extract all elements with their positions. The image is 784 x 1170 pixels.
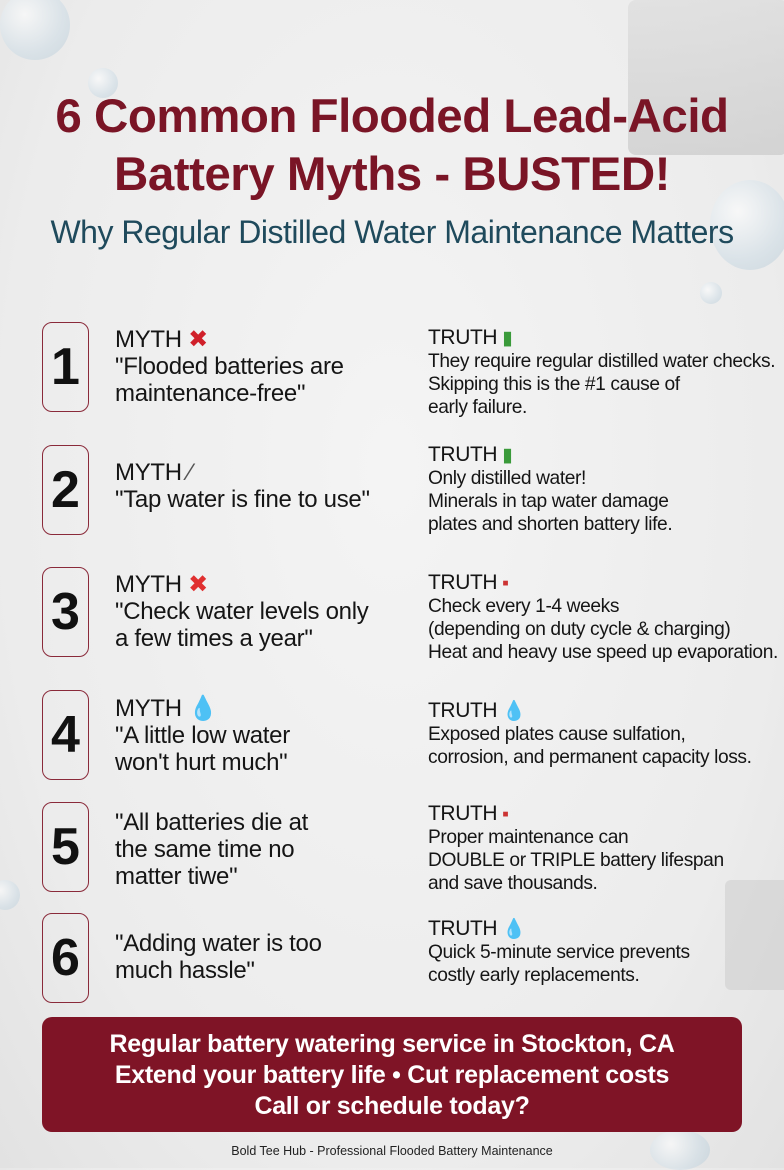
truth 2 — [428, 443, 672, 535]
title — [55, 90, 729, 201]
myth 5: matter tiwe" — [115, 863, 237, 890]
footer: Bold Tee Hub - Professional Flooded Battery Maintenance — [231, 1144, 553, 1158]
truth 2: Minerals in tap water damage — [428, 491, 668, 512]
number 4 — [42, 690, 89, 780]
truth 4: corrosion, and permanent capacity loss. — [428, 747, 752, 768]
myth 3: a few times a year" — [115, 625, 313, 652]
battery illustration bottom right — [725, 880, 784, 990]
number 1 — [42, 322, 89, 412]
truth 3: TRUTH ▪ — [428, 571, 508, 594]
myth 4: won't hurt much" — [115, 749, 287, 776]
row 4 — [42, 690, 752, 780]
number 6 — [42, 913, 89, 1003]
myth 1: MYTH ✖ — [115, 326, 208, 353]
truth 1: early failure. — [428, 397, 527, 418]
myth 2: MYTH ⁄ — [115, 459, 192, 486]
myth 4: MYTH 💧 — [115, 695, 218, 722]
truth 1: Skipping this is the #1 cause of — [428, 374, 680, 395]
myth 3: MYTH ✖ — [115, 571, 208, 598]
number 3 — [42, 567, 89, 657]
myth 5: "All batteries die at — [115, 809, 308, 836]
number 2: 2 — [51, 461, 80, 519]
truth 4 — [428, 699, 752, 768]
myth 2 — [115, 459, 370, 513]
myth 6: "Adding water is too — [115, 930, 322, 957]
row 1 — [42, 322, 775, 418]
myth 4 — [115, 694, 290, 776]
row 6 — [42, 913, 690, 1003]
truth 4: TRUTH 💧 — [428, 699, 526, 722]
truth 2: Only distilled water! — [428, 468, 586, 489]
myth 5 — [115, 809, 308, 890]
truth 1: They require regular distilled water checks. — [428, 351, 775, 372]
truth 6: TRUTH 💧 — [428, 917, 526, 940]
number 6: 6 — [51, 929, 80, 987]
call-to-action banner — [42, 1017, 742, 1132]
truth 4: Exposed plates cause sulfation, — [428, 724, 685, 745]
truth 5: TRUTH ▪ — [428, 802, 508, 825]
myth 1: "Flooded batteries are — [115, 353, 344, 380]
myth 5: the same time no — [115, 836, 294, 863]
row 2 — [42, 443, 672, 535]
myth 2: "Tap water is fine to use" — [115, 486, 370, 513]
call-to-action banner: Extend your battery life • Cut replacement costs — [115, 1061, 669, 1089]
call-to-action banner: Regular battery watering service in Stockton, CA — [110, 1030, 674, 1058]
truth 3: (depending on duty cycle & charging) — [428, 619, 730, 640]
myth 3: "Check water levels only — [115, 598, 368, 625]
myth 4: "A little low water — [115, 722, 290, 749]
number 5: 5 — [51, 818, 80, 876]
row 3 — [42, 567, 778, 663]
number 3: 3 — [51, 583, 80, 641]
row 5 — [42, 802, 724, 894]
truth 6 — [428, 917, 690, 986]
number 1: 1 — [51, 338, 80, 396]
myth 1 — [115, 326, 344, 407]
number 2 — [42, 445, 89, 535]
truth 2: plates and shorten battery life. — [428, 514, 672, 535]
myth 6 — [115, 930, 322, 984]
truth 3: Check every 1-4 weeks — [428, 596, 619, 617]
subtitle: Why Regular Distilled Water Maintenance Matters — [50, 214, 734, 250]
truth 1: TRUTH ▮ — [428, 326, 512, 349]
myth 3 — [115, 571, 369, 652]
myth 6: much hassle" — [115, 957, 255, 984]
truth 2: TRUTH ▮ — [428, 443, 512, 466]
myth 1: maintenance-free" — [115, 380, 305, 407]
truth 6: costly early replacements. — [428, 965, 639, 986]
title: Battery Myths - BUSTED! — [114, 148, 670, 201]
truth 5: and save thousands. — [428, 873, 597, 894]
truth 5: DOUBLE or TRIPLE battery lifespan — [428, 850, 724, 871]
truth 6: Quick 5-minute service prevents — [428, 942, 690, 963]
truth 1 — [428, 326, 775, 418]
truth 3: Heat and heavy use speed up evaporation. — [428, 642, 778, 663]
number 4: 4 — [51, 706, 80, 764]
battery illustration top right — [628, 0, 784, 155]
number 5 — [42, 802, 89, 892]
truth 3 — [428, 571, 778, 663]
truth 5: Proper maintenance can — [428, 827, 628, 848]
call-to-action banner: Call or schedule today? — [254, 1092, 530, 1120]
title: 6 Common Flooded Lead-Acid — [55, 90, 729, 143]
truth 5 — [428, 802, 724, 894]
